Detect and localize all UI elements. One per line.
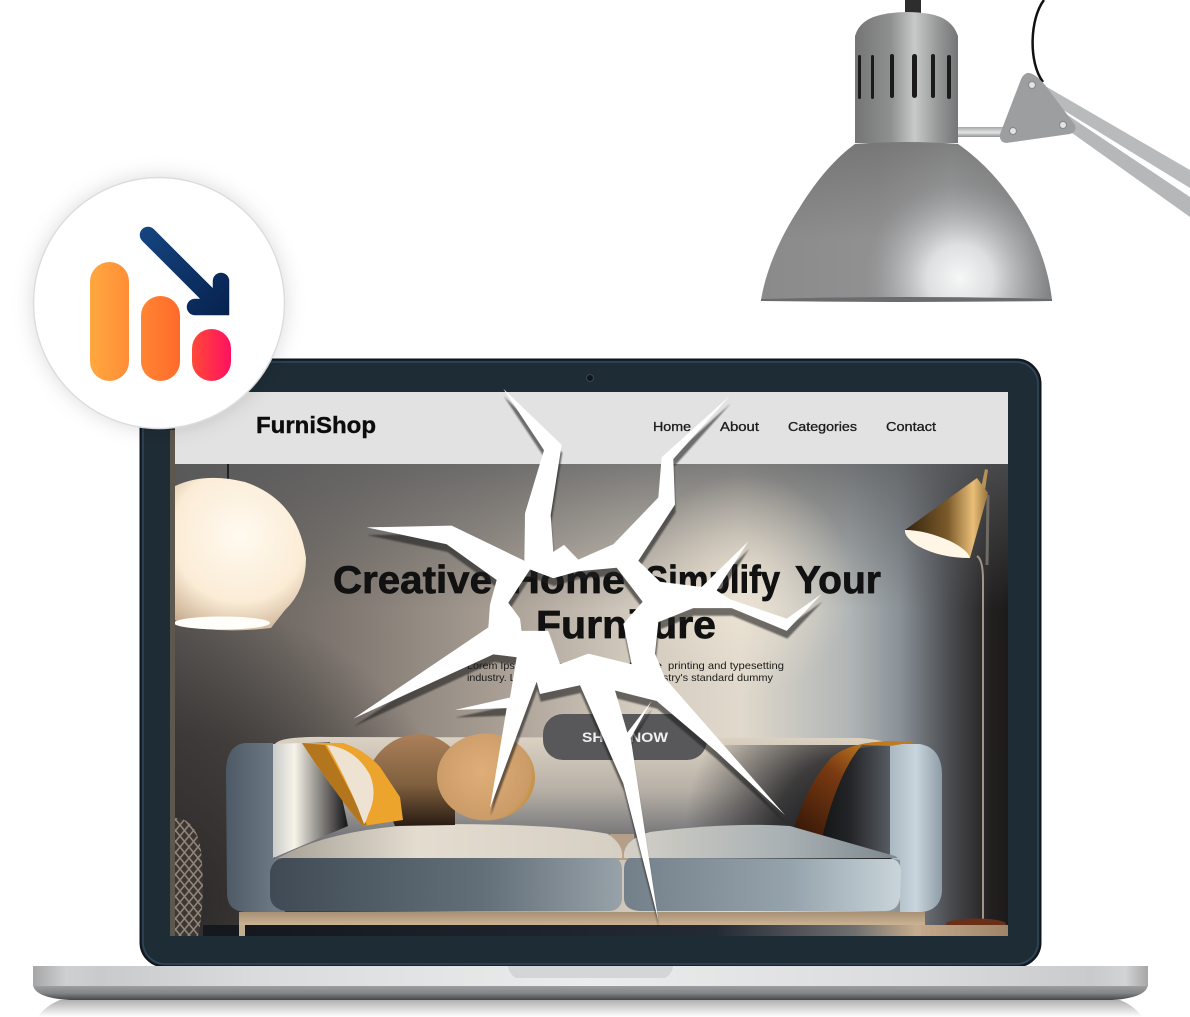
nav home: Home (653, 420, 691, 434)
screen crack (353, 389, 822, 928)
laptop lid (140, 360, 1040, 966)
wall glow (662, 488, 837, 650)
hero heading (333, 559, 881, 647)
base reflection (38, 1000, 1142, 1017)
left seat top (278, 824, 622, 858)
navigation bar (175, 392, 1008, 464)
right arm (890, 744, 942, 912)
shop now button (543, 714, 707, 760)
heading word creative: Creative (333, 559, 492, 602)
desk lamp (761, 0, 1190, 302)
sofa (226, 734, 942, 936)
floor lamp (905, 469, 1006, 930)
shade rim (761, 297, 1052, 302)
button label: SHOP NOW (582, 729, 669, 745)
paragraph line two end: industry's standard dummy (642, 672, 774, 684)
website screen (174, 392, 1008, 936)
sofa back shadow (685, 745, 892, 860)
lid inner edge (143, 362, 1038, 964)
nav contact: Contact (886, 420, 937, 434)
wall left shade (175, 633, 460, 936)
down arrow (148, 235, 221, 307)
shade opening (905, 530, 970, 558)
left arm (226, 743, 285, 912)
triangle bracket (1000, 73, 1075, 143)
pendant lamp (175, 478, 306, 630)
wall top shade (218, 464, 1008, 596)
right seat front (624, 858, 901, 911)
lamp finial (981, 469, 988, 490)
paragraph line one start: Lorem Ipsum is simply dummy text of the (467, 660, 662, 672)
paragraph line one end: printing and typesetting (668, 660, 784, 672)
sofa back (275, 737, 892, 860)
gold shade (905, 478, 988, 558)
tan pillow (437, 734, 535, 820)
paragraph line two start: industry. Lorem Ipsum has been the (467, 672, 637, 684)
lamp wire (1033, 0, 1044, 82)
short bar (192, 329, 231, 381)
left arm inner (273, 742, 348, 858)
laptop base (33, 966, 1148, 1017)
lamp arm lower (1060, 110, 1190, 217)
heading word home: Home (510, 559, 625, 602)
tall bar (90, 262, 129, 381)
yellow pillow stripes (302, 743, 367, 826)
left seat front (270, 858, 622, 911)
crack shape (353, 389, 822, 920)
neck vent slots (858, 54, 951, 99)
base top surface (33, 966, 1148, 986)
heading word simplify: Simplify (645, 559, 780, 602)
pendant opening (174, 616, 270, 630)
pendant cord (227, 464, 229, 480)
throw blanket (793, 741, 915, 838)
badge: declining bar chart icon (34, 178, 284, 428)
base lower edge (33, 985, 1148, 1000)
yellow pillow crescent (327, 745, 374, 824)
lamp cord (905, 0, 921, 13)
centre seat gap (610, 834, 634, 860)
logo: FurniShop (256, 412, 376, 438)
wall (175, 464, 1008, 936)
nav about: About (720, 420, 760, 434)
laptop (33, 360, 1148, 1017)
brown pillow (368, 734, 455, 826)
badge circle (34, 178, 284, 428)
lamp shade (761, 142, 1052, 300)
sofa leg left (239, 925, 245, 936)
sofa base rail (239, 912, 925, 925)
hero room scene (174, 464, 1008, 936)
lamp arm upper (1040, 83, 1190, 188)
hero paragraph (467, 660, 784, 684)
crack shadow (354, 396, 822, 928)
medium bar (141, 296, 180, 381)
lamp base (946, 918, 1006, 925)
shade highlight (761, 142, 1052, 300)
connector rod (957, 127, 1003, 137)
nav categories: Categories (788, 420, 857, 434)
yellow pillow (302, 743, 403, 826)
lamp neck (855, 12, 958, 143)
button shape (543, 714, 707, 760)
heading word your: Your (795, 559, 881, 602)
right seat top (624, 825, 898, 858)
lamp pole (977, 556, 983, 922)
lamp back arm (987, 495, 988, 565)
trackpad notch (508, 966, 673, 978)
heading word furniture: Furniture (536, 604, 716, 647)
shade top shading (761, 142, 1052, 300)
wicker vase (175, 818, 203, 936)
camera (586, 374, 594, 382)
floor (203, 925, 1008, 936)
right arm inner (823, 746, 890, 854)
left edge strip (170, 430, 175, 936)
bracket screws (1010, 82, 1066, 134)
sofa leg right (914, 925, 921, 936)
nav background (175, 392, 1008, 464)
